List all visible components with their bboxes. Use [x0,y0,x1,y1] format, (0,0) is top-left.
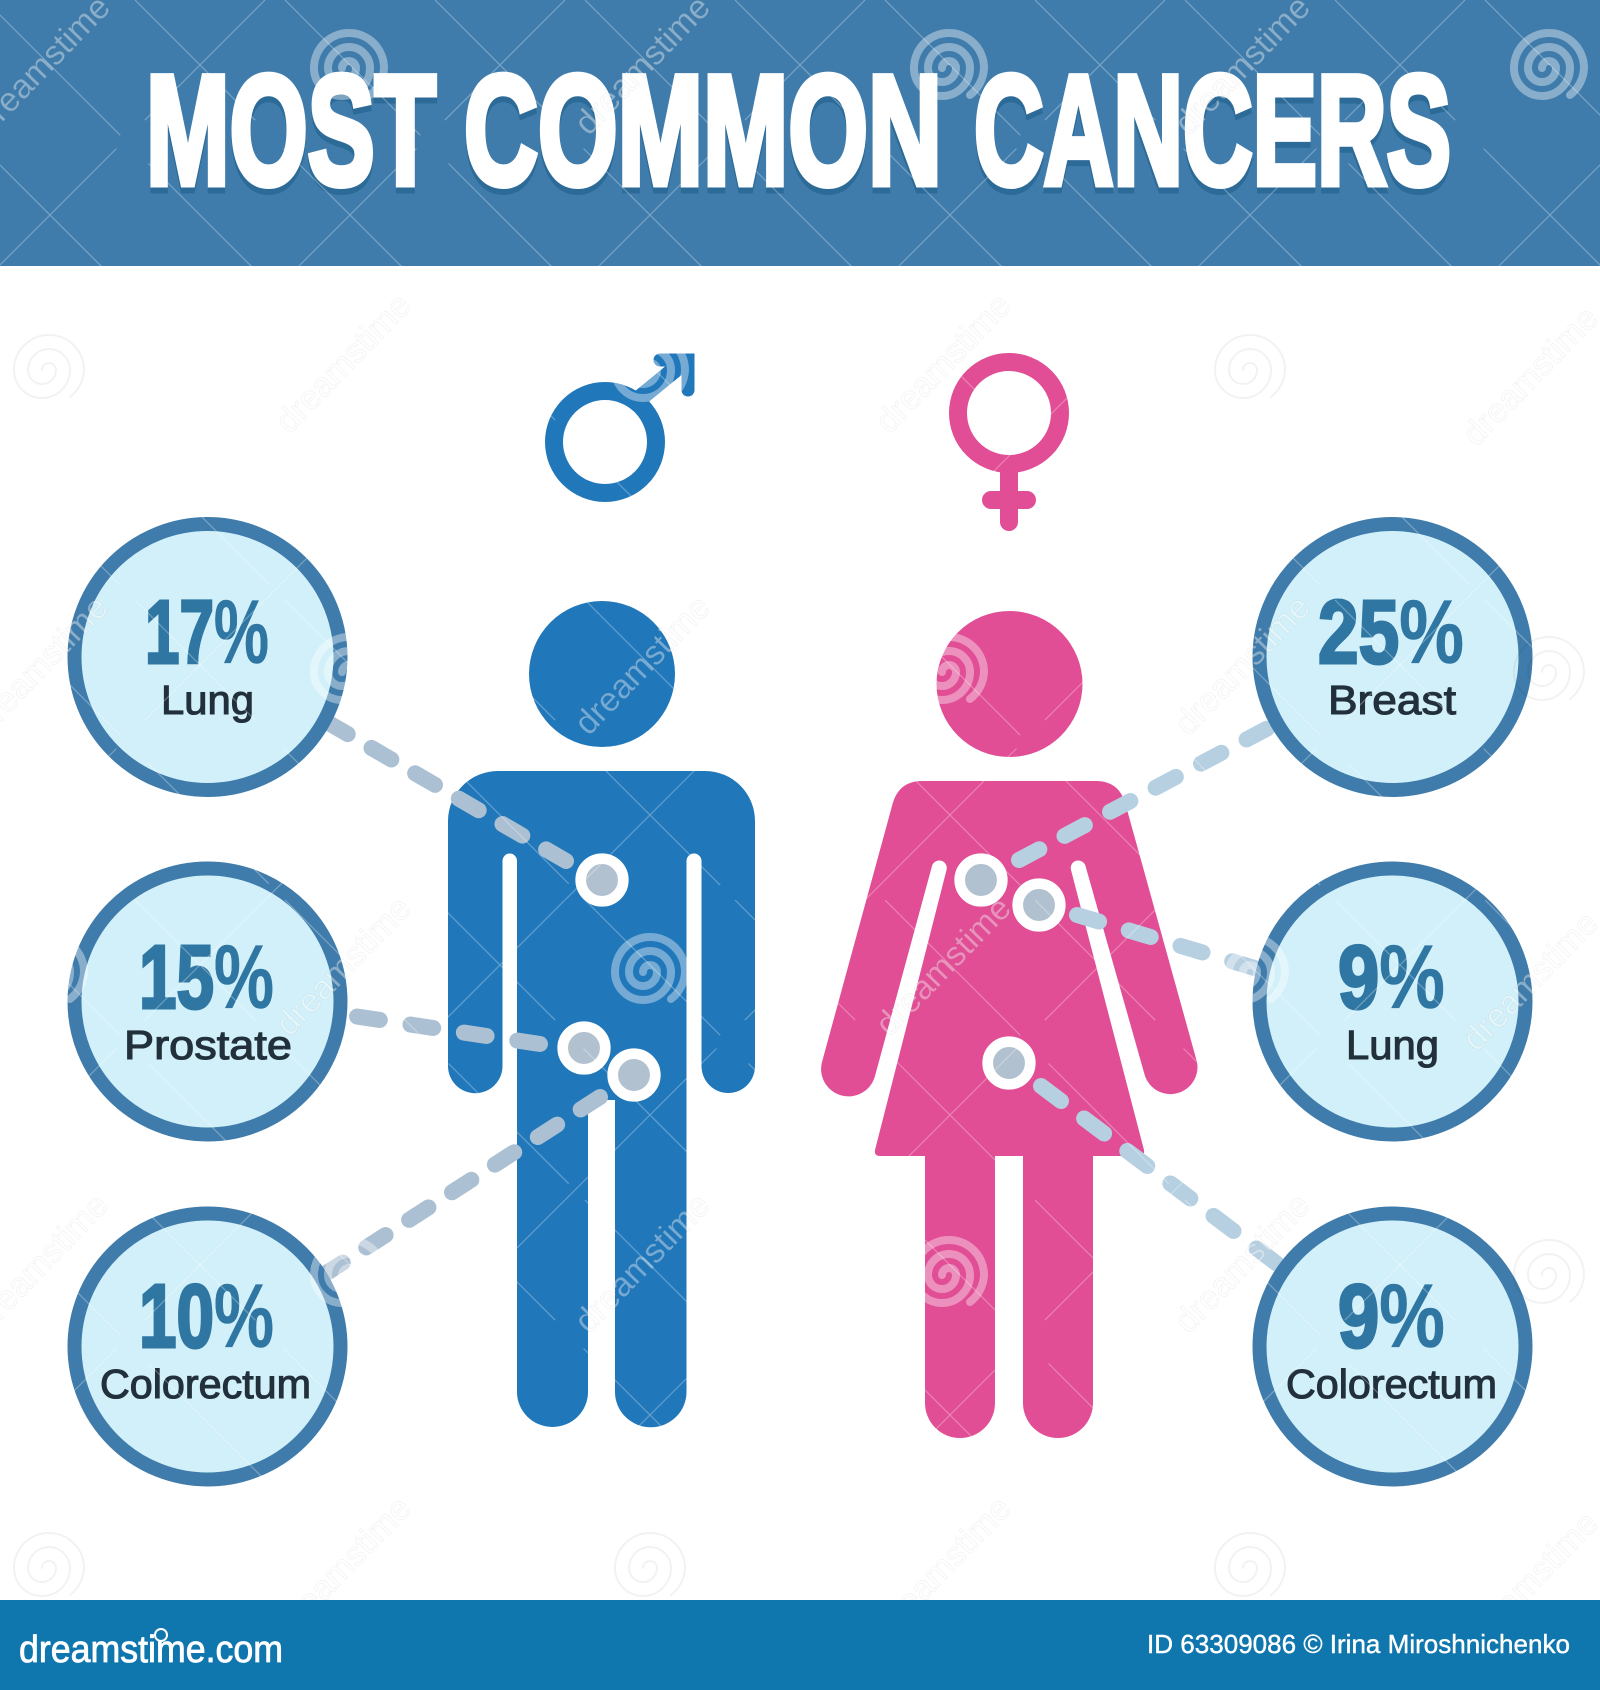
watermark text: dreamstime [567,1186,718,1340]
title: COMMON [464,44,942,218]
callout: male lung 17% [74,524,340,790]
dashed connector: male lung [320,718,566,861]
watermark text: dreamstime [1167,588,1318,742]
icon: female symbol [958,362,1060,522]
watermark text: dreamstime [567,588,718,742]
callout: female breast 25%: 25% [1318,583,1464,683]
footer credit: ID 63309086 © Irina Miroshnichenko [1147,1629,1570,1659]
callout: female lung 9%: Lung [1346,1022,1439,1068]
title [146,44,1451,218]
callout: female lung 9% [1260,868,1526,1134]
callout: female colorectum 9%: 9% [1338,1267,1445,1367]
watermark text: dreamstime [1167,1186,1318,1340]
watermark text: dreamstime [268,286,419,440]
watermark text: dreamstime [268,1489,419,1643]
dashed connector: male colorectum [325,1097,600,1274]
male figure [448,601,755,1427]
callout: female breast 25%: Breast [1328,677,1457,723]
title: MOST [146,44,436,218]
callout: male colorectum 10%: 10% [139,1267,274,1367]
marker dot: female breast [960,859,1002,901]
marker dot: female lung [1018,884,1060,926]
callout: male lung 17%: Lung [161,677,254,723]
marker dot: male prostate [563,1027,605,1069]
callout: male prostate 15% [74,868,340,1134]
footer logo text: dreamstime.com [19,1629,283,1671]
callout: female breast 25% [1260,524,1526,790]
female figure [821,611,1197,1438]
marker dot: female colorectum [988,1042,1030,1084]
callout: male colorectum 10%: Colorectum [100,1361,311,1407]
icon: male symbol [554,360,688,493]
header band [0,0,1600,266]
callout: female colorectum 9%: Colorectum [1286,1361,1497,1407]
dashed connector: female colorectum [1041,1086,1288,1272]
callout: female lung 9%: 9% [1338,928,1445,1028]
female body [821,781,1197,1438]
watermark text: dreamstime [868,889,1019,1043]
female head [936,611,1082,757]
watermark text: dreamstime [268,889,419,1043]
callout: male lung 17%: 17% [145,583,269,683]
dashed connector: female lung [1077,915,1268,972]
marker dot: male lung [581,859,623,901]
footer band [0,1600,1600,1690]
male head [529,601,675,747]
male body [448,771,755,1427]
dashed connector: female breast [1019,726,1272,860]
watermark text: dreamstime [868,1489,1019,1643]
callout: male prostate 15%: 15% [139,928,274,1028]
marker dot: male colorectum [613,1054,655,1096]
callout: male prostate 15%: Prostate [124,1022,292,1068]
dashed connector: male prostate [340,1014,540,1044]
callout: male colorectum 10% [74,1214,340,1480]
callout: female colorectum 9% [1260,1214,1526,1480]
watermark text: dreamstime [868,286,1019,440]
